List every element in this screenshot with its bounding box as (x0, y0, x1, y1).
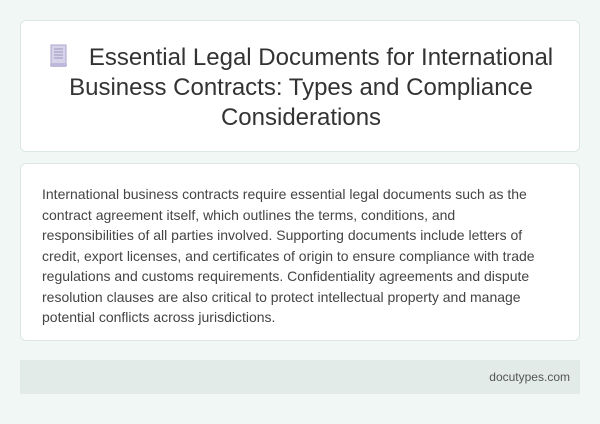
footer: source: docutypes.com (489, 370, 570, 384)
text block: summary: International business contracts require essential legal documents such as the (42, 186, 527, 202)
text block: summary: responsibilities of all parties involved. Supporting documents include letters of (42, 227, 522, 243)
title: Essential Legal Documents for International Business Contracts: Types and Compliance Considerations (69, 44, 553, 131)
text block: summary: contract agreement itself, which outlines the terms, conditions, and (42, 206, 455, 222)
text block: summary: potential conflicts across jurisdictions. (42, 309, 275, 325)
footer: source (20, 360, 580, 394)
title card (20, 20, 580, 152)
icon: document (50, 44, 67, 67)
text block: summary (20, 163, 580, 341)
text block: summary: resolution clauses are also critical to protect intellectual property and manage (42, 288, 521, 304)
text block: summary: regulations and customs requirements. Confidentiality agreements and dispute (42, 268, 529, 284)
text block: summary: credit, export licenses, and certificates of origin to ensure compliance with trade (42, 248, 535, 264)
